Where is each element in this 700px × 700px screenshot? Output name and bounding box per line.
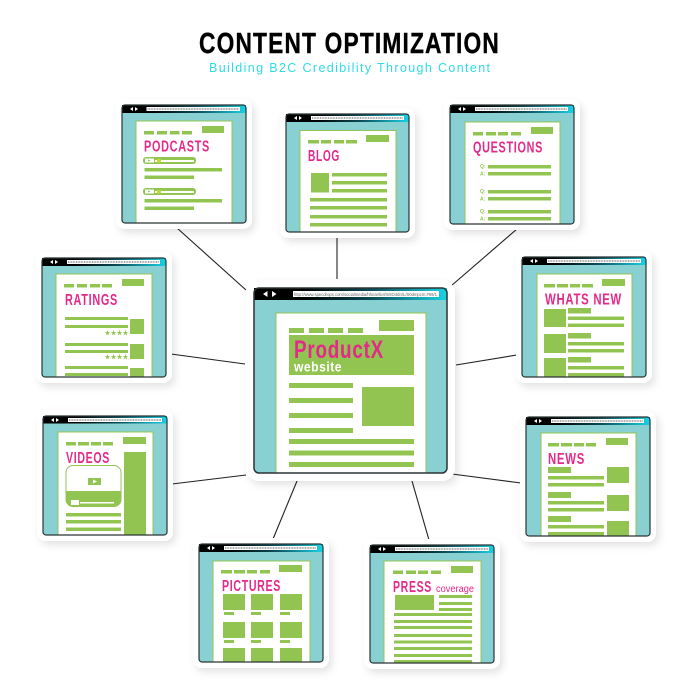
q and a labels: Q: [480,189,486,195]
q and a lines [488,165,551,220]
rating stars [104,328,128,362]
panel: whats new [516,251,652,383]
q and a labels: A: [480,172,486,178]
panel: pictures [193,538,329,668]
banner [289,335,414,375]
heading: pictures: PICTURES [222,578,281,595]
heading: press coverage: PRESS [393,579,432,596]
url bar: http://www.specdrops.com/socialmedia/hhnar/tiel/m8O4dn/L/S0dmpcm,#59/1 [294,292,437,297]
q and a labels: A: [480,196,486,202]
panel: podcasts [116,99,252,229]
panel: blog [280,108,415,238]
press content [394,595,472,663]
heading: videos: VIDEOS [66,450,110,467]
panel: central website [246,280,455,481]
q and a labels: Q: [480,164,486,170]
news items [544,308,624,377]
heading: blog: BLOG [308,148,340,165]
audio player 1 [143,157,196,164]
news items [548,467,629,536]
panel: questions [444,99,580,230]
audio player 2 [143,188,196,195]
text lines and image [289,383,414,467]
subtitle: Building B2C Credibility Through Content [209,61,491,75]
nav bars [289,320,414,333]
heading: news: NEWS [548,451,585,468]
q and a labels: A: [480,216,486,222]
panel: press coverage [364,539,500,669]
connector lines [171,228,523,540]
icon: browser arrows [263,291,276,297]
heading: whats new: WHATS NEW [545,292,622,308]
rating stars: ★★★★ [104,352,128,362]
q and a labels: Q: [480,209,486,215]
panel: ratings [36,252,172,383]
heading: press coverage: coverage [436,584,474,595]
title: CONTENT OPTIMIZATION [199,28,500,60]
rating lines [65,317,144,377]
blog content [310,173,387,226]
q and a labels [480,164,486,222]
panel: videos [37,410,173,541]
video player [66,466,121,506]
rating stars: ★★★★ [104,328,128,338]
heading: podcasts: PODCASTS [144,138,210,156]
banner: website [293,358,342,374]
heading: ratings: RATINGS [65,292,118,309]
picture grid [223,594,302,662]
banner: ProductX [294,336,384,364]
panel: news [520,411,656,542]
heading: questions: QUESTIONS [473,140,543,156]
